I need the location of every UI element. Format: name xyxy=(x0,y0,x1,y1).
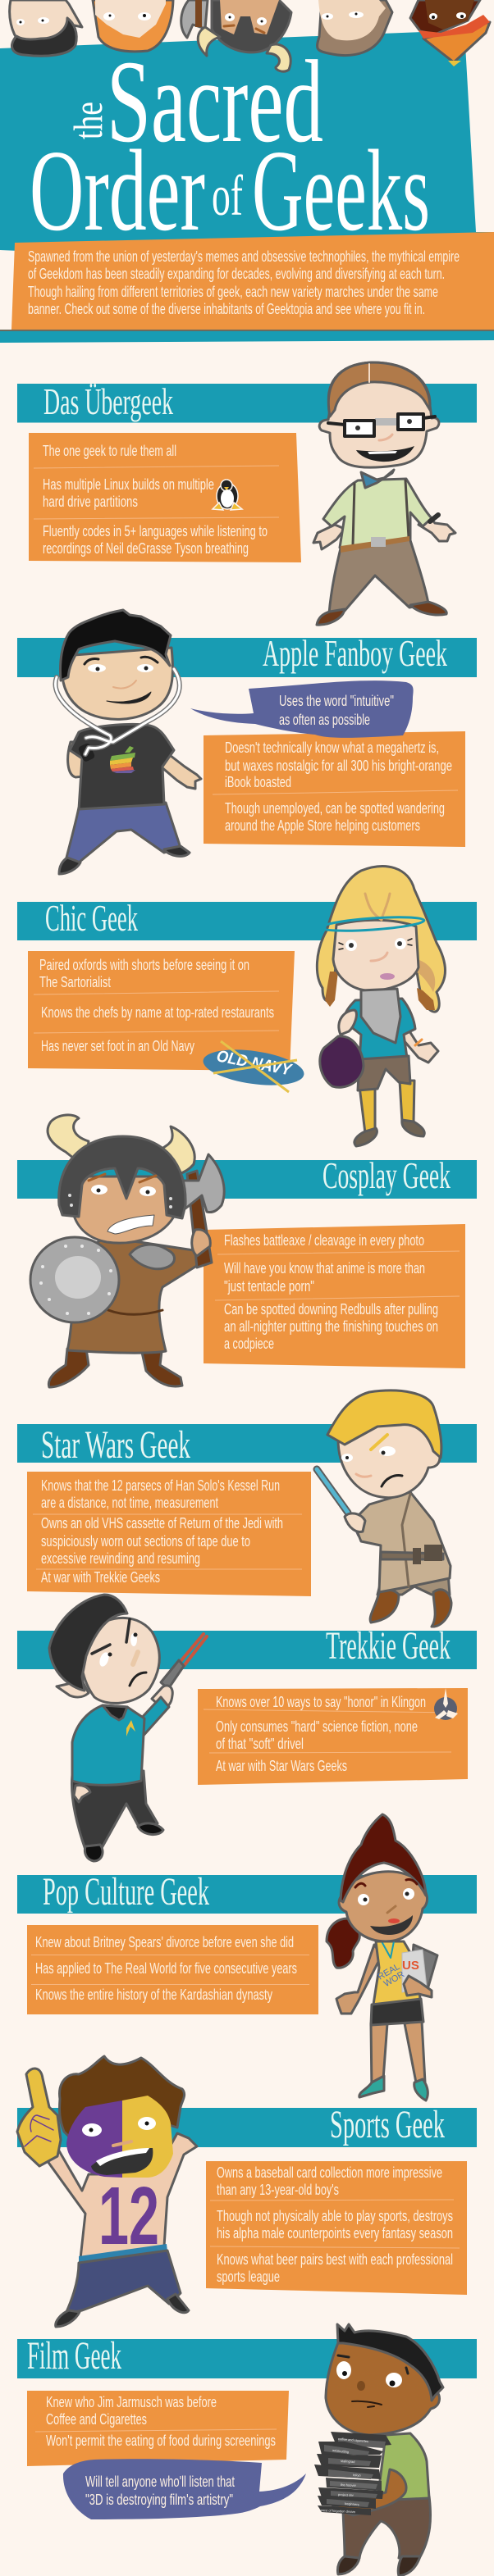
teal strip xyxy=(0,331,494,343)
trait: Has never set foot in an Old Navy xyxy=(41,1038,194,1054)
foam finger xyxy=(17,2069,61,2166)
hair xyxy=(328,362,430,416)
brows xyxy=(89,1174,156,1182)
title word: of: of xyxy=(212,165,243,228)
head: viking geek with axe xyxy=(181,0,291,71)
movie case: stalingrad xyxy=(341,2459,355,2464)
mouth xyxy=(91,2148,153,2175)
mouth xyxy=(130,1673,146,1686)
raised arm and hand xyxy=(152,1686,172,1709)
magazine title: US xyxy=(402,1959,419,1973)
section: Das Ubergeek xyxy=(17,362,477,625)
panel: traits xyxy=(27,2391,289,2466)
torso xyxy=(72,1705,144,1785)
magazine xyxy=(402,1950,427,1992)
trait: Has applied to The Real World for five consecutive years xyxy=(35,1960,297,1977)
movie case: tokyo xyxy=(353,2473,362,2478)
jersey number: 12 xyxy=(98,2170,159,2262)
banner xyxy=(17,638,477,677)
nose xyxy=(113,680,136,689)
small faces details xyxy=(16,11,466,25)
bracelet xyxy=(415,1040,422,1045)
heading: Das Übergeek xyxy=(43,380,173,422)
legs xyxy=(359,1081,414,1133)
face xyxy=(71,1176,177,1243)
pouch xyxy=(413,1548,421,1564)
helmet xyxy=(59,1136,185,1218)
eyes xyxy=(345,940,357,951)
bubble text xyxy=(279,693,394,728)
trait: excessive rewinding and resuming xyxy=(41,1550,200,1567)
heading: Chic Geek xyxy=(45,897,138,939)
movie stack xyxy=(314,2432,391,2515)
bubble text: Uses the word "intuitive" xyxy=(279,693,394,709)
trait xyxy=(43,476,214,510)
bubble text: Will tell anyone who'll listen that xyxy=(85,2474,235,2490)
section: Sports Geek xyxy=(17,2056,477,2327)
nose xyxy=(357,2381,365,2391)
character: Vulcan geek xyxy=(49,1595,207,1861)
shirt xyxy=(323,479,432,548)
trait: suspiciously worn out sections of tape due to xyxy=(41,1533,250,1550)
section: Trekkie Geek xyxy=(17,1595,477,1861)
lower hand xyxy=(74,1785,90,1802)
nose xyxy=(133,1652,138,1664)
trait: At war with Trekkie Geeks xyxy=(41,1569,160,1586)
head: pop culture geek xyxy=(410,0,490,66)
banner xyxy=(17,2108,477,2147)
title word: Sacred: Sacred xyxy=(107,37,323,167)
bubble text xyxy=(85,2474,235,2508)
tunic xyxy=(67,1238,202,1353)
icon: crossed-out Old Navy logo: OLD NAVY xyxy=(215,1047,294,1080)
shorts xyxy=(358,1056,410,1090)
section: Film Geek xyxy=(17,2324,477,2576)
nose xyxy=(387,1906,396,1913)
shoes xyxy=(354,1120,424,1146)
trait: Knew who Jim Jarmusch was before xyxy=(46,2394,217,2410)
banner xyxy=(17,1160,477,1199)
waistband xyxy=(79,2244,167,2264)
trait: Owns an old VHS cassette of Return of the Jedi with xyxy=(41,1515,283,1531)
shield xyxy=(30,1237,119,1322)
trait xyxy=(46,2394,217,2428)
panel: traits xyxy=(198,1688,468,1785)
arms xyxy=(313,512,455,549)
helmet rivets xyxy=(68,1194,71,1197)
belt xyxy=(381,1552,443,1559)
trait xyxy=(41,1515,283,1567)
ear xyxy=(57,1681,89,1697)
face yellow half xyxy=(122,2096,173,2178)
panel: traits xyxy=(204,731,465,847)
apple logo xyxy=(110,746,135,773)
panel: traits xyxy=(204,1224,465,1368)
insignia xyxy=(126,1720,135,1736)
face purple half xyxy=(66,2100,122,2178)
banner xyxy=(17,2339,477,2378)
trait xyxy=(224,1301,438,1352)
boots xyxy=(370,1590,451,1627)
eyes xyxy=(91,1185,107,1195)
eyes xyxy=(336,2361,351,2379)
legs xyxy=(329,538,428,613)
legs xyxy=(371,2021,425,2091)
trait: Knew about Britney Spears' divorce before even she did xyxy=(35,1934,294,1950)
section: Pop Culture Geek xyxy=(17,1814,477,2100)
eyes xyxy=(88,664,106,672)
head xyxy=(80,1618,159,1703)
trait xyxy=(217,2251,453,2285)
nose xyxy=(113,2141,131,2146)
shirt text: REAL xyxy=(376,1962,401,1982)
axe blade xyxy=(180,1154,224,1213)
character: Apple fanboy xyxy=(56,610,201,874)
lightsaber xyxy=(317,1469,348,1513)
phaser xyxy=(178,1634,207,1666)
head xyxy=(62,648,173,719)
eyes xyxy=(358,1894,369,1905)
bubble text: as often as possible xyxy=(279,712,370,728)
movie case: beginners xyxy=(345,2501,359,2506)
hair xyxy=(60,2056,185,2140)
speech bubble xyxy=(63,2459,306,2519)
glasses xyxy=(328,414,435,436)
section: Star Wars Geek xyxy=(17,1390,477,1627)
header xyxy=(0,0,494,343)
brow xyxy=(338,2355,408,2373)
title word: the: the xyxy=(65,102,111,139)
banner xyxy=(17,1631,477,1669)
shoes xyxy=(59,846,190,874)
bubble text: "3D is destroying film's artistry" xyxy=(85,2492,233,2508)
trait: Coffee and Cigarettes xyxy=(46,2411,147,2428)
hair xyxy=(337,2324,443,2401)
icon: Tux penguin xyxy=(213,480,242,510)
character: Ubergeek xyxy=(313,362,455,625)
movie case: project der xyxy=(338,2492,354,2497)
trait: are a distance, not time, measurement xyxy=(41,1495,218,1511)
magazine back xyxy=(410,1945,437,1992)
mouth xyxy=(107,692,151,703)
hair xyxy=(341,1814,426,1902)
trait: Won't permit the eating of food during screenings xyxy=(46,2433,276,2449)
hair xyxy=(60,610,171,680)
mouth xyxy=(370,1915,413,1935)
left arm xyxy=(336,1945,382,2014)
shoes xyxy=(359,2076,428,2100)
teal title panel xyxy=(0,30,494,271)
trait: a codpiece xyxy=(224,1336,274,1352)
ponytail xyxy=(327,1918,359,1968)
shoulder pad xyxy=(130,1245,174,1269)
eyes xyxy=(82,2123,102,2137)
skirt xyxy=(371,1999,423,2025)
wristband xyxy=(430,515,438,521)
main title xyxy=(30,37,430,255)
top xyxy=(343,999,415,1062)
head xyxy=(339,1872,428,1941)
title word: Order: Order xyxy=(30,125,205,255)
trait: iBook boasted xyxy=(225,774,291,790)
intro panel xyxy=(11,232,494,330)
trait: than any 13-year-old boy's xyxy=(217,2182,339,2198)
panel: traits xyxy=(29,433,301,562)
earphones xyxy=(56,669,180,754)
banner xyxy=(17,902,477,940)
eyes xyxy=(98,1651,111,1668)
section: Chic Geek xyxy=(17,867,477,1146)
character: Sports fan xyxy=(17,2056,197,2327)
trait: hard drive partitions xyxy=(43,494,138,510)
trait: Has multiple Linux builds on multiple xyxy=(43,476,214,493)
section: Apple Fanboy Geek xyxy=(17,610,477,874)
brow xyxy=(371,1435,387,1450)
nose and lips xyxy=(371,953,387,961)
brows xyxy=(92,1619,130,1654)
bowtie xyxy=(361,470,394,488)
trait: Paired oxfords with shorts before seeing it on xyxy=(39,957,249,973)
hands and arm xyxy=(332,2469,406,2515)
hair xyxy=(49,1595,127,1691)
bag xyxy=(320,1036,364,1087)
arms xyxy=(68,742,201,789)
shirt xyxy=(377,2433,429,2501)
head xyxy=(338,1413,440,1498)
hand xyxy=(339,1010,356,1035)
hair xyxy=(327,1390,441,1458)
trait xyxy=(225,800,445,834)
trait: of that "soft" drivel xyxy=(216,1736,304,1752)
mouth xyxy=(352,2401,382,2407)
panel: traits xyxy=(28,951,295,1071)
shirt xyxy=(70,724,174,809)
tank top xyxy=(373,1941,420,2005)
intro text xyxy=(28,248,460,317)
trait: Knows the chefs by name at top-rated restaurants xyxy=(41,1004,274,1021)
trait: The one geek to rule them all xyxy=(43,443,176,459)
trait xyxy=(216,1718,418,1752)
trait xyxy=(43,523,268,557)
trait xyxy=(225,740,452,790)
icon: crossed-out Old Navy logo xyxy=(201,1041,306,1092)
nose xyxy=(379,435,392,440)
right hand xyxy=(404,1976,432,1997)
head xyxy=(326,2335,439,2435)
axe handle xyxy=(187,1171,212,1268)
robe xyxy=(353,1492,451,1592)
shoes xyxy=(85,1823,163,1861)
mouth xyxy=(356,446,414,462)
hand xyxy=(192,1230,210,1256)
character: Chic geek xyxy=(317,867,445,1146)
trait: Knows that the 12 parsecs of Han Solo's Kessel Run xyxy=(41,1477,280,1494)
hair back xyxy=(317,867,445,1012)
head: black-haired geek xyxy=(10,0,82,56)
trait: Only consumes "hard" science fiction, none xyxy=(216,1718,418,1735)
brows xyxy=(355,1879,417,1887)
mouth xyxy=(107,1215,154,1234)
banner xyxy=(17,1875,477,1914)
character: Film geek xyxy=(314,2324,443,2576)
trait: around the Apple Store helping customers xyxy=(225,817,420,834)
movie case: west of forgotten dream xyxy=(321,2508,356,2514)
movie case: wristcutting xyxy=(332,2448,349,2454)
character: Jedi geek xyxy=(317,1390,451,1627)
legs xyxy=(343,2496,431,2560)
trait: At war with Star Wars Geeks xyxy=(216,1758,347,1774)
movie case: the hoover xyxy=(341,2483,357,2487)
boots xyxy=(48,1345,182,1387)
horns xyxy=(48,1115,89,1167)
shirt text: WOR xyxy=(382,1969,406,1989)
trait xyxy=(217,2164,442,2198)
mouth xyxy=(382,1476,402,1486)
banner xyxy=(17,1424,477,1463)
trait xyxy=(224,1260,425,1295)
banner xyxy=(17,384,477,423)
heading: Pop Culture Geek xyxy=(43,1870,209,1914)
trait: "just tentacle porn" xyxy=(224,1278,314,1295)
trait: Fluently codes in 5+ languages while listening to xyxy=(43,523,268,539)
pants xyxy=(66,2251,181,2314)
panel: traits xyxy=(206,2161,467,2295)
movie case: coffee and cigarettes xyxy=(338,2437,368,2443)
right arm xyxy=(399,1025,438,1063)
trait: The Sartorialist xyxy=(39,974,111,990)
shoes xyxy=(56,2294,189,2327)
trait xyxy=(217,2208,453,2241)
head: red-haired geek xyxy=(93,0,173,52)
trait xyxy=(41,1477,280,1511)
head: brown-haired geek xyxy=(318,0,392,55)
arms and bare torso xyxy=(45,2133,197,2259)
panel: traits xyxy=(27,1472,311,1596)
head xyxy=(319,362,439,467)
shoes xyxy=(337,2556,420,2576)
ipod xyxy=(77,743,95,762)
hand xyxy=(345,1513,365,1531)
belt xyxy=(341,536,409,553)
brows xyxy=(85,657,158,664)
eyes xyxy=(341,1454,353,1462)
trait: recordings of Neil deGrasse Tyson breathing xyxy=(43,540,249,557)
necklace xyxy=(382,1941,394,1958)
trait: sports league xyxy=(217,2269,280,2285)
heading: Star Wars Geek xyxy=(41,1423,190,1467)
scarf xyxy=(361,989,400,1043)
panel: traits xyxy=(27,1925,318,2014)
face xyxy=(333,920,419,990)
legs xyxy=(66,803,181,862)
collar xyxy=(103,1705,127,1720)
speech bubble xyxy=(190,680,414,738)
row of upside-down geek heads xyxy=(10,0,490,71)
shoes xyxy=(317,602,446,625)
character: Viking cosplay geek xyxy=(30,1115,224,1387)
legs xyxy=(71,1771,158,1850)
heading: Film Geek xyxy=(27,2334,121,2378)
trait xyxy=(39,957,249,990)
trait: Knows the entire history of the Kardashian dynasty xyxy=(35,1987,272,2003)
pants xyxy=(377,1562,450,1595)
headband xyxy=(321,915,424,933)
character: Pop culture geek xyxy=(327,1814,437,2100)
icon: Klingon emblem xyxy=(434,1688,458,1720)
section: Cosplay Geek xyxy=(17,1115,477,1387)
